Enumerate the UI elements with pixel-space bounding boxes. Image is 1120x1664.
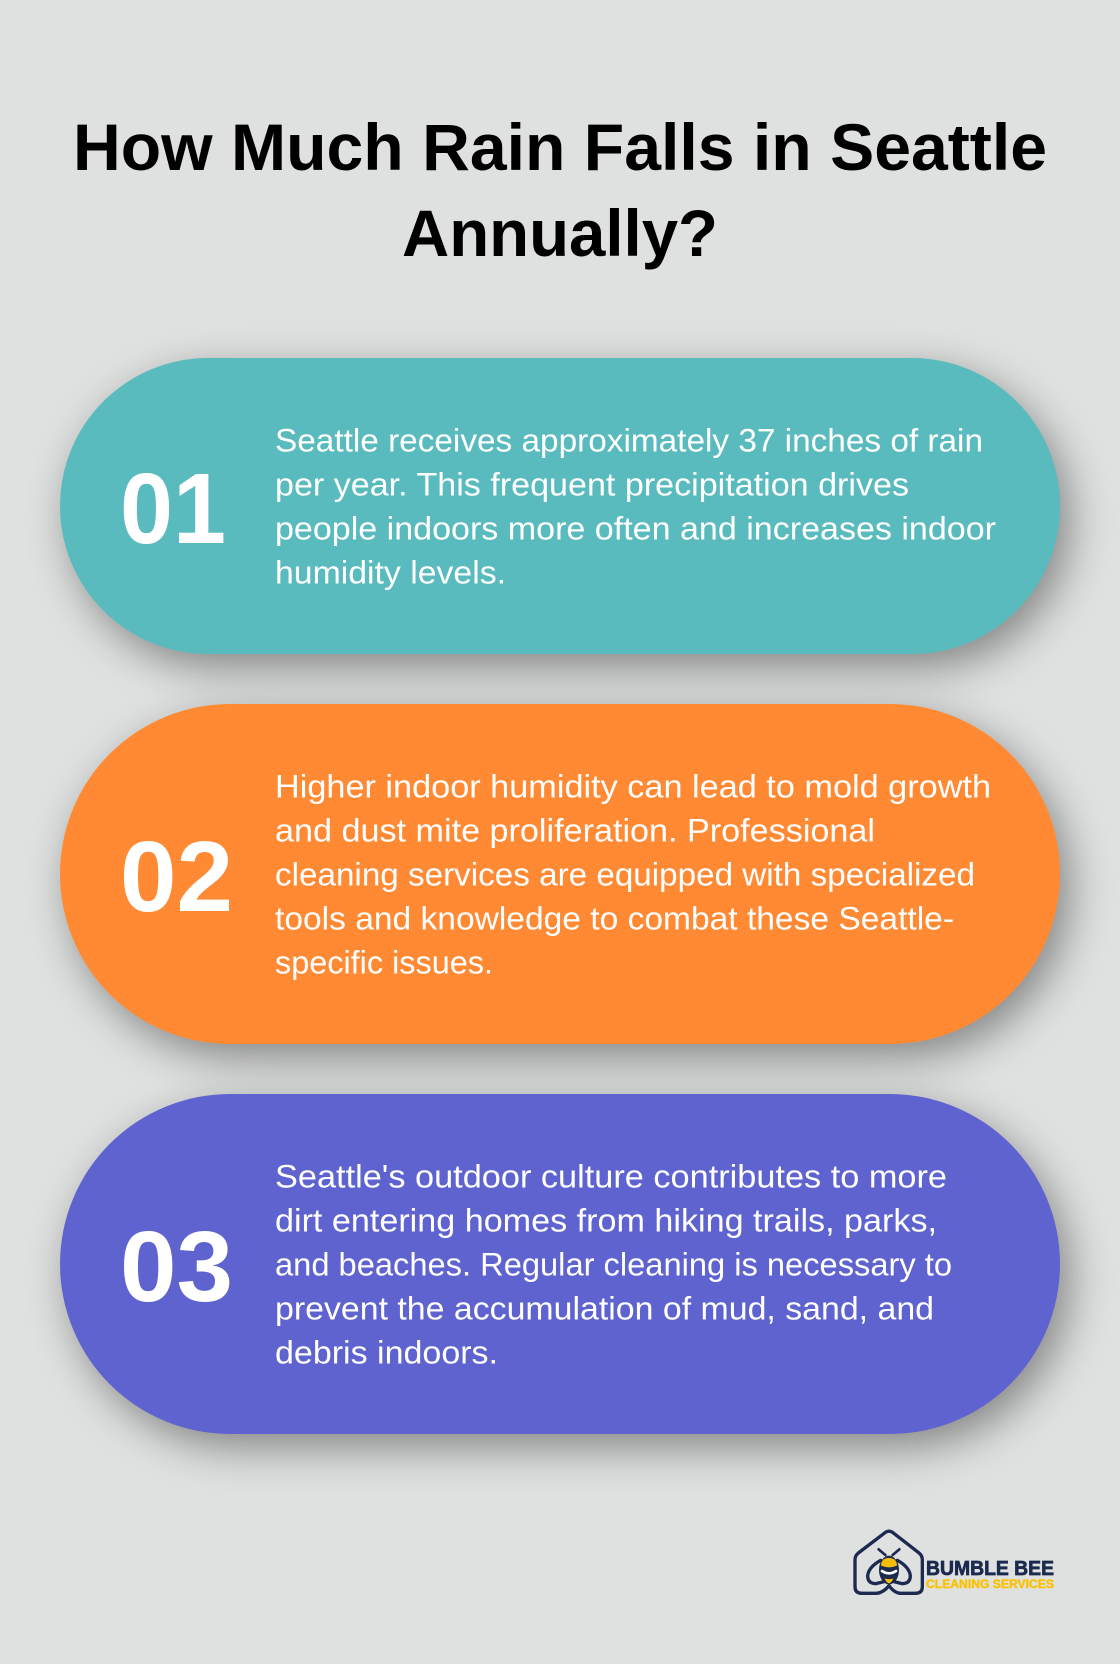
title <box>73 110 1047 270</box>
text block 03: prevent the accumulation of mud, sand, and <box>275 1290 934 1326</box>
icon: bee in house <box>855 1531 922 1593</box>
text block 03: debris indoors. <box>275 1334 498 1370</box>
text block 03: Seattle's outdoor culture contributes to more <box>275 1158 947 1194</box>
number 03: 03 <box>120 1211 233 1323</box>
text block 02: and dust mite proliferation. Professional <box>275 812 875 848</box>
title: How Much Rain Falls in Seattle <box>73 110 1047 184</box>
title: Annually? <box>402 196 718 270</box>
text block 02: cleaning services are equipped with specialized <box>275 856 975 892</box>
text block 01: Seattle receives approximately 37 inches of rain <box>275 422 983 458</box>
pill background orange <box>60 704 1060 1044</box>
panel: step 01 rainfall <box>60 358 1060 654</box>
text block 02 <box>275 768 991 980</box>
text block 02: tools and knowledge to combat these Seattle- <box>275 900 954 936</box>
wordmark: BUMBLE BEE <box>926 1558 1054 1580</box>
text block 03: dirt entering homes from hiking trails, parks, <box>275 1202 937 1238</box>
number 02: 02 <box>120 821 233 933</box>
text block 01: humidity levels. <box>275 554 506 590</box>
text block 03 <box>275 1158 952 1370</box>
text block 02: specific issues. <box>275 944 493 980</box>
logo: Bumble Bee Cleaning Services <box>855 1531 1054 1593</box>
text block 03: and beaches. Regular cleaning is necessary to <box>275 1246 952 1282</box>
text block 02: Higher indoor humidity can lead to mold growth <box>275 768 991 804</box>
text block 01: people indoors more often and increases indoor <box>275 510 996 546</box>
text block 01: per year. This frequent precipitation drives <box>275 466 909 502</box>
panel: step 03 outdoor culture <box>60 1094 1060 1434</box>
pill background teal <box>60 358 1060 654</box>
panel: step 02 humidity <box>60 704 1060 1044</box>
pill background indigo <box>60 1094 1060 1434</box>
number 01: 01 <box>120 453 226 565</box>
text block 01 <box>275 422 996 590</box>
tagline: CLEANING SERVICES <box>926 1577 1054 1591</box>
